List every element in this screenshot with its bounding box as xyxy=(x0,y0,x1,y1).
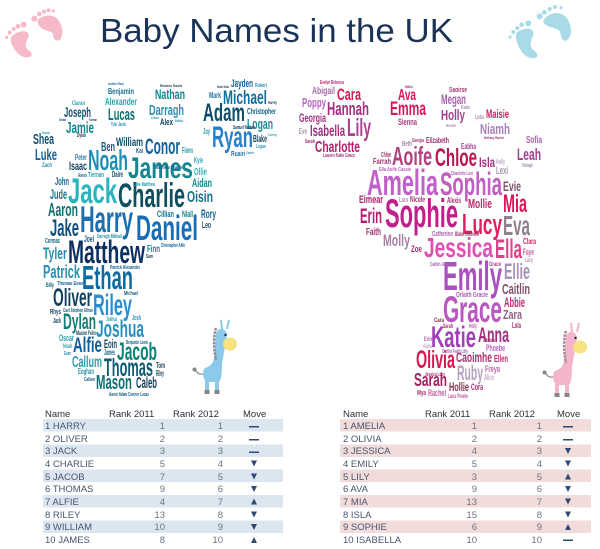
toe: Maisie and Niamh: Niamh xyxy=(480,121,510,138)
sole: medium names: Georgia xyxy=(412,138,424,144)
toe: Nathan and Darragh xyxy=(149,83,185,127)
table: boys names ranking: 1 HARRY xyxy=(45,421,87,432)
table: boys names ranking: 1 xyxy=(160,421,165,432)
sole: medium names: Faye xyxy=(523,247,534,257)
sole: medium names: Blake Rochelle xyxy=(455,232,479,238)
toe: Maisie and Niamh xyxy=(475,107,510,140)
word cloud: boys footprint xyxy=(33,78,278,398)
toe: Shea and Luke: Luke xyxy=(35,147,57,164)
toe: Hannah, Lily and Charlotte: Hannah xyxy=(327,99,369,119)
sole: large names: Ethan xyxy=(82,259,133,296)
table: boys names ranking: 8 xyxy=(218,510,223,521)
toe: Adam, Michael and Ryan: Ruairi xyxy=(231,151,245,158)
sole: large names: Eva xyxy=(503,210,530,241)
heel: names: Anna xyxy=(478,324,509,347)
table: boys names ranking: 2 OLIVER xyxy=(45,434,88,445)
sole: medium names: Darragh Mikhail xyxy=(97,234,122,240)
sole: medium names: Zoe xyxy=(411,244,422,254)
sole: medium names: Caitlin Jessica xyxy=(430,262,454,268)
table: girls names ranking: Name xyxy=(343,409,368,420)
table: girls names ranking: 6 xyxy=(537,484,542,495)
toe: Adam, Michael and Ryan: Ryan xyxy=(212,121,253,154)
table: girls names ranking: 3 xyxy=(537,446,542,457)
table: girls names ranking: 10 xyxy=(466,535,477,546)
sole: medium names: Eimear xyxy=(359,194,383,206)
table: girls names ranking: 1 xyxy=(537,421,542,432)
table: boys names ranking: 5 JACOB xyxy=(45,472,85,483)
sole: medium names: Aaron xyxy=(78,173,87,179)
heel: names: Dylan xyxy=(63,309,96,334)
table: boys names ranking: 6 xyxy=(218,484,223,495)
toe: Adam, Michael and Ryan: Robert xyxy=(255,83,267,89)
toe: Adam, Michael and Ryan: Logan xyxy=(256,144,266,150)
table: boys names ranking: 3 xyxy=(218,446,223,457)
sole: medium names: Leo xyxy=(202,220,211,230)
heel: names: Olivia xyxy=(416,346,456,374)
sole: medium names: Fionn xyxy=(182,146,193,155)
heel: names: Jack xyxy=(53,318,61,325)
sole: medium names: Sam xyxy=(146,254,153,260)
heel: names: Katie xyxy=(431,321,476,354)
sole: medium names: Holly xyxy=(496,159,505,166)
table: boys names ranking: 6 THOMAS xyxy=(45,484,93,495)
table: boys names ranking: 4 CHARLIE xyxy=(45,459,94,470)
table: boys names ranking: 1 xyxy=(218,421,223,432)
sole: large names: Lucy xyxy=(462,209,502,241)
word cloud: boys footprint: Riley xyxy=(156,369,164,378)
table: girls names ranking: 5 xyxy=(537,472,542,483)
toe: Joseph and Lucas xyxy=(59,81,137,139)
table: girls names ranking: 9 xyxy=(472,484,477,495)
table: boys names ranking xyxy=(43,409,283,546)
toe: Joseph and Lucas: Shea xyxy=(59,117,67,122)
sole: medium names: Eabha xyxy=(461,142,476,151)
toe: Hannah, Lily and Charlotte: Eve xyxy=(299,127,307,136)
table: boys names ranking: 7 ALFIE xyxy=(45,497,79,508)
toe: Shea and Luke: Zach xyxy=(42,163,52,169)
toe: Shea and Luke: Shea xyxy=(33,131,54,148)
sole: medium names: Aidan xyxy=(192,176,212,190)
sole: large names: Erin xyxy=(360,205,382,228)
toe: Ava and Emma: Sienna xyxy=(398,117,418,127)
table: boys names ranking: 2 xyxy=(160,434,165,445)
heel: names: Abbie xyxy=(483,338,495,344)
heel: names: Rhys xyxy=(50,309,61,316)
sole: medium names: Elizabeth xyxy=(426,136,449,145)
toe: Hannah, Lily and Charlotte: Isabella xyxy=(310,123,345,140)
sole: large names: Aaron xyxy=(48,200,78,220)
sole: medium names: Chloe xyxy=(381,152,391,159)
sole: medium names: Alexis xyxy=(447,196,461,205)
table: boys names ranking: 8 xyxy=(160,535,165,546)
table: boys names ranking: Move xyxy=(243,409,266,420)
sole: large names xyxy=(43,134,198,322)
heel: names: Cara xyxy=(434,318,444,324)
heel: names: Alana xyxy=(423,344,432,350)
sole: medium names: Patrick Alexander xyxy=(110,265,140,271)
table: girls names ranking xyxy=(340,409,591,546)
sole: medium names: Ella Aoife Cassie xyxy=(379,167,411,173)
table: boys names ranking: 7 xyxy=(160,472,165,483)
heel: names: Mya xyxy=(417,390,426,397)
table: girls names ranking: 1 AMELIA xyxy=(343,421,386,432)
heel: names: Thomas Evan xyxy=(57,281,83,287)
sole: medium names: Abbie xyxy=(504,294,525,310)
table: girls names ranking: 4 xyxy=(472,446,477,457)
toe: Adam, Michael and Ryan: Jayden xyxy=(231,78,253,90)
sole: medium names: Mollie xyxy=(468,196,492,211)
sole: medium names: Isaac xyxy=(69,159,87,173)
toe: Joseph and Lucas: Tyler Jacob xyxy=(111,122,126,128)
heel: names: Laura Phoebe xyxy=(448,394,468,400)
sole: medium names: Caitlin xyxy=(502,281,530,298)
toe: Hannah, Lily and Charlotte: Abigail xyxy=(312,86,335,97)
sole: medium names: Zara xyxy=(503,307,523,322)
toe: Joseph and Lucas: Dylan xyxy=(77,133,86,139)
toe: Adam, Michael and Ryan: Logan xyxy=(247,116,273,133)
table: boys names ranking: Rank 2012 xyxy=(173,409,219,420)
table: boys names ranking: 9 xyxy=(160,484,165,495)
toe: Megan and Holly xyxy=(441,87,470,128)
table: girls names ranking: 8 xyxy=(537,510,542,521)
toe: Sofia and Leah: Sofia xyxy=(526,135,542,146)
sole: medium names: Ellie xyxy=(504,259,530,284)
table: girls names ranking: 7 xyxy=(537,497,542,508)
word cloud: girls footprint xyxy=(299,80,542,400)
toe: Nathan and Darragh: Reuben David xyxy=(160,83,182,88)
table: boys names ranking: 13 xyxy=(154,510,165,521)
heel: names: James xyxy=(104,348,115,357)
table: boys names ranking: 9 xyxy=(218,522,223,533)
toe: Megan and Holly: Megan xyxy=(441,91,466,107)
sole: large names: Sophia xyxy=(440,166,502,202)
sole: large names: Sophie xyxy=(385,192,458,236)
sole: large names: Oliver xyxy=(53,284,92,312)
toe: Ava and Emma: Emma xyxy=(390,99,426,120)
heel: names: Joshua xyxy=(96,316,144,343)
icon: blue baby footprints xyxy=(508,5,571,58)
toe: Megan and Holly: Brooke xyxy=(446,123,456,128)
toe: Hannah, Lily and Charlotte: Evelyn Rebecca xyxy=(320,80,344,86)
table: boys names ranking: Name xyxy=(45,409,70,420)
table: girls names ranking: 10 xyxy=(531,535,542,546)
table: girls names ranking: Rank 2012 xyxy=(489,409,535,420)
icon: pink giraffe xyxy=(542,323,587,397)
heel: names: Noah xyxy=(63,344,72,350)
heel: names: Cora xyxy=(471,382,484,392)
sole: medium names xyxy=(45,135,216,271)
sole: large names: Noah xyxy=(88,145,128,177)
sole: medium names: Ben xyxy=(101,139,115,154)
toe: Adam, Michael and Ryan xyxy=(203,78,278,158)
toe: Shea and Luke: Ronan xyxy=(42,130,50,135)
icon: pink baby footprints xyxy=(5,8,62,57)
heel: names xyxy=(46,281,165,398)
sole: large names: James xyxy=(128,152,193,185)
heel: names: Michael xyxy=(124,291,138,297)
heel: names: Mason Felix xyxy=(76,331,96,337)
sole: large names: Tyler xyxy=(43,244,67,263)
sole: medium names: John xyxy=(55,176,69,188)
sole: medium names: Jude xyxy=(50,186,67,202)
heel: names: Billy xyxy=(46,283,54,289)
heel: names: Jessica Lucy xyxy=(425,372,445,378)
toe: Joseph and Lucas: Lucas xyxy=(108,105,135,124)
toe: Hannah, Lily and Charlotte: Lauren Katie Grace xyxy=(323,153,355,159)
table: boys names ranking: 4 xyxy=(218,459,223,470)
table: girls names ranking: 2 OLIVIA xyxy=(343,434,382,445)
sole: medium names: Cormac xyxy=(45,238,60,245)
table: girls names ranking: 4 xyxy=(537,459,542,470)
table: girls names ranking: 3 JESSICA xyxy=(343,446,391,457)
toe: Hannah, Lily and Charlotte: Georgia xyxy=(299,111,326,125)
toe: Hannah, Lily and Charlotte xyxy=(299,80,371,159)
toe: Nathan and Darragh: Alex xyxy=(160,117,173,127)
table: girls names ranking: 9 xyxy=(537,522,542,533)
table: girls names ranking: 13 xyxy=(466,497,477,508)
heel: names: Aaron Adam Connor Lucas xyxy=(109,392,149,398)
table: girls names ranking: 6 xyxy=(472,522,477,533)
heel: names: Joshua xyxy=(106,317,117,323)
heel: names: Cael Stephen Ethan xyxy=(63,308,93,314)
table: girls names ranking: 10 ISABELLA xyxy=(343,535,402,546)
table: girls names ranking: 4 EMILY xyxy=(343,459,379,470)
sole: large names: Conor xyxy=(145,134,180,159)
sole: large names: Charlie xyxy=(118,177,185,215)
sole: medium names: Cillian xyxy=(157,209,174,219)
table: girls names ranking: 15 xyxy=(466,510,477,521)
title: Baby Names in the UK xyxy=(100,12,453,49)
sole: medium names: Lara xyxy=(399,197,408,204)
toe: Adam, Michael and Ryan: Sean Kian xyxy=(217,84,229,89)
toe: Hannah, Lily and Charlotte: Cara xyxy=(337,85,361,104)
sole: large names: Matthew xyxy=(68,234,145,270)
sole: medium names: Luke Matthew xyxy=(133,182,155,188)
sole: large names: Daniel xyxy=(136,209,198,248)
toe: Megan and Holly: Katie xyxy=(461,105,470,111)
heel: names: Sarah xyxy=(443,324,453,330)
sole: large names: Grace xyxy=(443,289,502,330)
table: girls names ranking: 2 xyxy=(472,434,477,445)
sole: medium names: Evie xyxy=(503,178,521,194)
sole: medium names: Peter xyxy=(75,153,87,162)
toe: Adam, Michael and Ryan: Adam xyxy=(203,99,245,127)
sole: large names: Amelia xyxy=(367,162,439,203)
toe: Megan and Holly: Saoirse xyxy=(449,87,467,94)
sole: large names: Jake xyxy=(50,215,79,242)
heel: names: Alfie xyxy=(73,334,102,357)
sole: medium names: Beth xyxy=(402,141,412,148)
table: boys names ranking: 10 xyxy=(212,535,223,546)
sole: medium names: Joel xyxy=(84,234,94,244)
sole: medium names: Nicole xyxy=(410,195,425,204)
toe: Adam, Michael and Ryan: Michael xyxy=(223,88,267,109)
sole: large names: Harry xyxy=(80,199,133,240)
sole: medium names: Matthew Charlie xyxy=(155,165,183,171)
table: boys names ranking: 5 xyxy=(218,472,223,483)
heel: names: Ruby xyxy=(457,362,483,385)
sole: medium names: Daire xyxy=(112,170,123,179)
sole: medium names: Isla xyxy=(479,154,495,170)
table: boys names ranking: 4 xyxy=(160,497,165,508)
sole: medium names: Farrah xyxy=(373,157,391,166)
toe: Joseph and Lucas: Ciaran xyxy=(72,101,85,107)
toe: Maisie and Niamh: Bethany Rachel xyxy=(484,135,504,140)
sole: medium names: Christopher Alfie xyxy=(161,243,185,249)
sole: medium names: Oisin xyxy=(187,189,213,206)
sole: large names: Mia xyxy=(503,190,528,218)
sole: medium names: William xyxy=(116,135,143,149)
heel: names: Hollie xyxy=(449,380,469,394)
toe: Adam, Michael and Ryan: Jay xyxy=(203,127,210,136)
table: boys names ranking: 3 xyxy=(160,446,165,457)
table: boys names ranking: 8 RILEY xyxy=(45,510,81,521)
sole: medium names: Faith xyxy=(366,227,381,238)
toe: Hannah, Lily and Charlotte: Poppy xyxy=(302,95,326,110)
sole: medium names: Niall xyxy=(182,209,193,219)
table: girls names ranking: 2 xyxy=(537,434,542,445)
table: boys names ranking: 3 JACK xyxy=(45,446,78,457)
sole: medium names: Tiernan xyxy=(88,172,104,179)
sole: large names xyxy=(360,141,530,330)
heel: names: Caleb xyxy=(136,375,157,392)
heel: names: Lola xyxy=(512,321,521,330)
heel: names: Mason xyxy=(96,372,132,394)
sole: medium names: Charlotte Lexi xyxy=(451,171,473,177)
toe: Sofia and Leah: Leah xyxy=(517,145,541,164)
heel: names xyxy=(414,318,521,400)
sole: medium names: Kai xyxy=(136,148,143,155)
toe: Megan and Holly: Holly xyxy=(441,107,465,124)
toe: Ava and Emma xyxy=(390,84,426,127)
sole: medium names: Finn xyxy=(147,244,160,255)
toe: Adam, Michael and Ryan: Samuel Nathan xyxy=(233,125,255,131)
sole: large names: Jessica xyxy=(424,232,493,263)
table: girls names ranking: Rank 2011 xyxy=(425,409,470,420)
table: boys names ranking: 7 xyxy=(218,497,223,508)
toe: Adam, Michael and Ryan: Corey xyxy=(268,132,278,137)
heel: names: Josh xyxy=(132,315,141,322)
table: girls names ranking: 1 xyxy=(472,421,477,432)
toe: Joseph and Lucas: Alexander xyxy=(105,97,137,108)
table: boys names ranking: Rank 2011 xyxy=(109,409,154,420)
sole: medium names: Rory xyxy=(201,207,216,221)
sole: large names: Emily xyxy=(443,253,502,299)
sole: medium names: Grace xyxy=(489,262,501,268)
table: boys names ranking: 5 xyxy=(160,459,165,470)
icon: blue giraffe xyxy=(192,320,237,394)
sole: large names: Molly xyxy=(383,231,410,250)
sole: large names: Patrick xyxy=(43,262,81,282)
sole: large names: Ella xyxy=(495,234,523,264)
table: girls names ranking: 5 LILY xyxy=(343,472,370,483)
table: boys names ranking: 10 xyxy=(154,522,165,533)
heel: names: Caoimhe xyxy=(456,349,492,365)
table: girls names ranking: 5 xyxy=(472,459,477,470)
sole: large names: Aoife xyxy=(392,141,432,171)
toe: Ava and Emma: Millie xyxy=(405,84,414,89)
sole: medium names: Ollie xyxy=(194,167,207,178)
toe: Shea and Luke xyxy=(33,130,57,169)
heel: names: Callum xyxy=(84,377,95,383)
heel: names: Jacob xyxy=(117,338,157,366)
heel: names: Erin xyxy=(424,337,432,343)
heel: names: Callum xyxy=(72,354,102,371)
toe: Hannah, Lily and Charlotte: Sarah xyxy=(305,139,315,145)
heel: names: Oscar xyxy=(59,333,74,343)
sole: large names: Riley xyxy=(93,289,132,322)
sole: medium names: Lucy xyxy=(525,258,533,264)
heel: names: Alice xyxy=(484,373,494,382)
toe: Adam, Michael and Ryan: Carter xyxy=(246,150,254,155)
sole: medium names: Kyle xyxy=(194,156,203,165)
toe: Hannah, Lily and Charlotte: Charlotte xyxy=(315,139,360,156)
heel: names: Eoghan xyxy=(78,367,94,376)
heel: names: Eoin xyxy=(104,337,117,351)
toe: Ava and Emma: Ava xyxy=(398,87,416,104)
toe: Maisie and Niamh: Lydia xyxy=(475,115,484,121)
toe: Joseph and Lucas: Kieran xyxy=(89,117,97,122)
heel: names: Phoebe xyxy=(486,343,505,353)
heel: names: Evan xyxy=(64,351,71,357)
table: girls names ranking: 9 SOPHIE xyxy=(343,522,387,533)
toe: Nathan and Darragh: Conor xyxy=(151,115,159,120)
toe: Adam, Michael and Ryan: Christopher xyxy=(247,107,276,116)
table: girls names ranking: 7 MIA xyxy=(343,497,368,508)
toe: Hannah, Lily and Charlotte: Lily xyxy=(347,114,371,142)
sole: medium names: Clara xyxy=(523,237,536,246)
heel: names: Ellen xyxy=(494,354,508,365)
toe: Nathan and Darragh: Nathan xyxy=(155,86,185,102)
toe: Nathan and Darragh: Bobby xyxy=(175,118,183,123)
table: girls names ranking: 8 ISLA xyxy=(343,510,372,521)
toe: Adam, Michael and Ryan: Mark xyxy=(209,91,221,100)
table: girls names ranking: 3 xyxy=(472,472,477,483)
sole: medium names: Lexi xyxy=(496,165,508,177)
heel: names: Tom xyxy=(156,361,165,370)
table: boys names ranking: 9 WILLIAM xyxy=(45,522,92,533)
toe: Joseph and Lucas: Jamie xyxy=(66,120,94,137)
toe: Adam, Michael and Ryan: Harvey xyxy=(268,100,277,105)
table: boys names ranking: 2 xyxy=(218,434,223,445)
heel: names: Thomas xyxy=(104,354,153,382)
toe: Joseph and Lucas: Joseph xyxy=(64,104,91,120)
toe: Adam, Michael and Ryan: Blake xyxy=(253,134,267,145)
toe: Sofia and Leah xyxy=(517,135,542,169)
heel: names: Rachel xyxy=(428,388,446,398)
table: girls names ranking: Move xyxy=(557,409,580,420)
sole: large names: Chloe xyxy=(435,144,477,172)
heel: names: Freya xyxy=(485,364,501,374)
heel: names: Sarah xyxy=(414,370,447,390)
sole: medium names: Catherine xyxy=(432,231,453,238)
heel: names: Benjamin Lewis xyxy=(126,340,148,346)
table: boys names ranking: 10 JAMES xyxy=(45,535,90,546)
heel: names: Caitlin Faith Lilly xyxy=(442,349,468,355)
sole: medium names: Orlaith Gracie xyxy=(456,292,488,299)
toe: Sofia and Leah: Shelagh xyxy=(522,163,533,169)
toe: Joseph and Lucas: Austin Rory xyxy=(108,81,125,86)
sole: large names: Jack xyxy=(68,172,117,211)
sole: medium names xyxy=(359,136,536,322)
heel: names: Holly xyxy=(469,324,477,330)
toe: Joseph and Lucas: Benjamin xyxy=(108,87,134,96)
toe: Maisie and Niamh: Maisie xyxy=(486,107,509,121)
table: girls names ranking: 6 AVA xyxy=(343,484,369,495)
toe: Nathan and Darragh: Darragh xyxy=(149,102,184,119)
